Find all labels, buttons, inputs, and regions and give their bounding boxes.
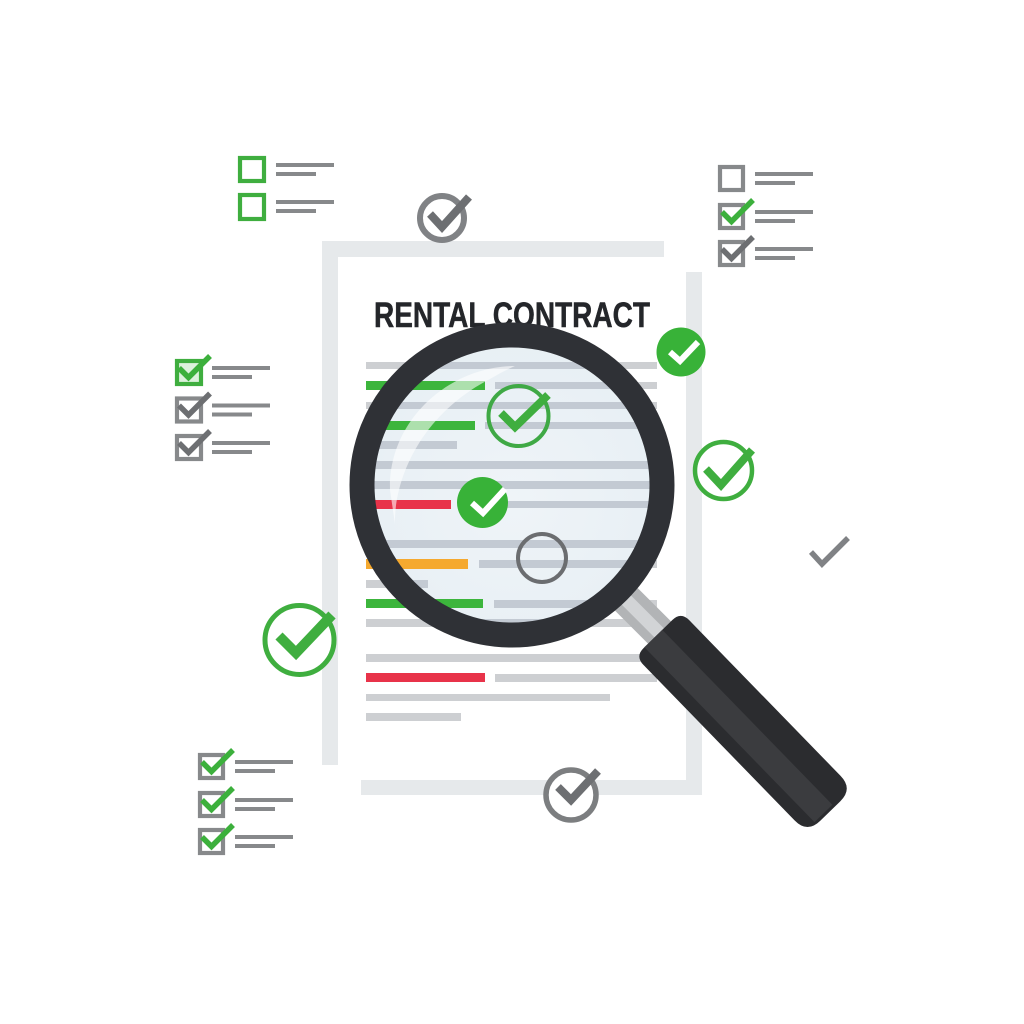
icon: outlined check inside lens: [488, 386, 548, 446]
contract document: [322, 241, 702, 795]
checklist: bottom left: [200, 750, 293, 853]
icon: filled check inside lens: [457, 477, 508, 528]
lower text lines: [366, 654, 657, 721]
row 1: [177, 356, 270, 384]
icon: filled check top right: [656, 328, 706, 376]
title: rental contract: RENTAL CONTRACT: [374, 296, 650, 335]
magnifier neck: [607, 580, 682, 655]
icon: lone gray check: [811, 538, 848, 564]
checklist: top right: [720, 167, 813, 265]
coloured clause highlights: [366, 381, 485, 608]
row 2: [240, 195, 334, 219]
icon: gray check bottom: [546, 770, 598, 820]
row 2: [200, 788, 293, 816]
row 3: [200, 825, 293, 853]
icon: empty gray circle inside lens: [518, 534, 566, 582]
row 3: [720, 237, 813, 265]
magnifying glass: [362, 335, 853, 833]
row 1: [240, 158, 334, 181]
row 2: [720, 200, 813, 228]
row 3: [177, 431, 270, 459]
row 2: [177, 394, 270, 422]
row 1: [200, 750, 293, 778]
text lines above the fold: [366, 362, 657, 627]
checklist: left: [177, 356, 270, 459]
document frame strokes: [322, 241, 702, 795]
checklist: top left: [240, 158, 334, 219]
icon: large outlined check left: [265, 606, 334, 674]
icon: outlined check right: [695, 442, 752, 499]
row 1: [720, 167, 813, 190]
magnifier handle: [635, 612, 853, 833]
icon: gray check top: [420, 196, 469, 240]
magnifier ring: [362, 335, 662, 635]
lens with magnified lines: [366, 343, 657, 627]
